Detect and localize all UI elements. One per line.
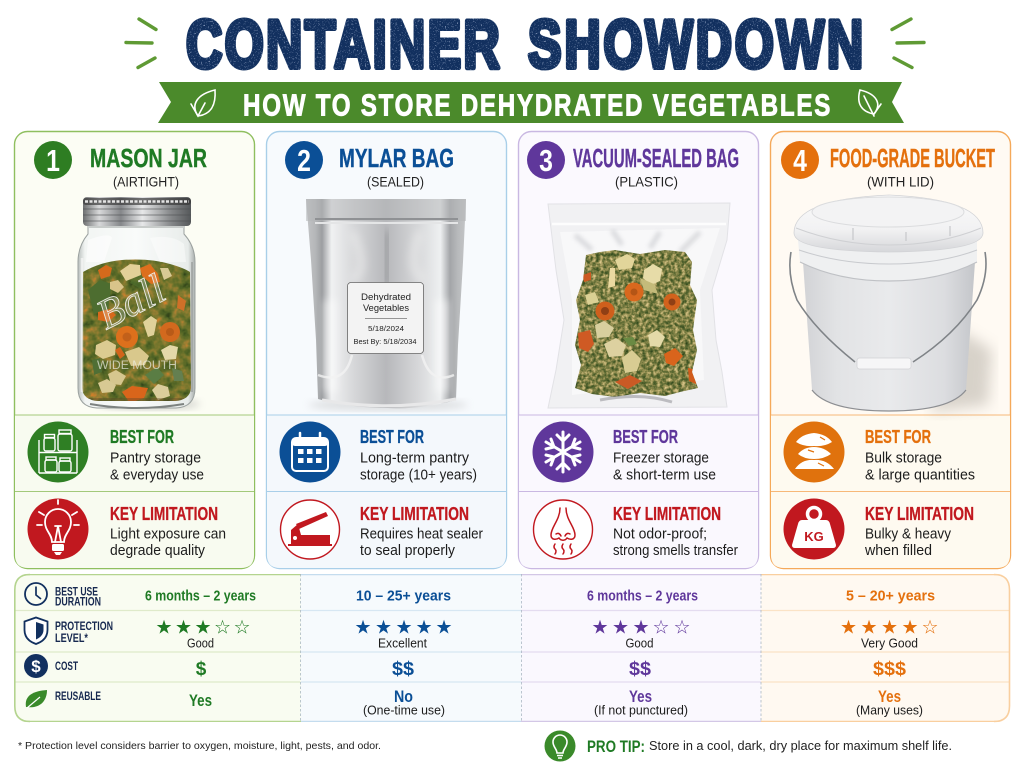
icon: shield [24,618,48,644]
title: Container Showdown: CONTAINER [186,6,500,82]
text [613,526,738,559]
text [864,526,951,559]
value: vacuum bag [594,687,688,718]
value: vacuum bag: $$ [629,659,651,680]
panel: vacuum-sealed bag [518,132,758,568]
stars: bucket 4 of 5: ★ [840,618,857,638]
label: BEST FOR [110,427,174,447]
pouch label [348,282,424,354]
value: vacuum bag: Yes [629,687,652,706]
icon: leaf [26,690,47,708]
stars: bucket 4 of 5: ☆ [921,618,939,638]
pouch label: 5/18/2024 [368,324,404,333]
value: vacuum bag: (If not punctured) [594,704,688,718]
decorative title rays left [126,19,156,68]
icon: kg weight [784,498,844,560]
best for row [784,422,975,484]
icon: nose with smell [534,500,592,559]
row label: LEVEL* [55,633,88,645]
icon: light bulb [28,498,88,560]
icon: heat sealer [280,500,340,559]
text: Long-term pantry [360,450,469,466]
value: mason jar: 6 months – 2 years [145,588,256,604]
stars: bucket 4 of 5 [840,618,939,638]
icon: leaf left [191,90,215,116]
image: glass mason jar [78,197,200,410]
value: bucket [856,687,923,718]
stars: mylar bag 5 of 5: ★ [354,618,372,638]
stars: vacuum bag 3 of 5: ★ [591,618,609,638]
pro tip [544,730,952,762]
ribbon text: HOW TO STORE DEHYDRATED VEGETABLES [243,88,830,122]
label: KEY LIMITATION [613,504,721,524]
text [360,526,483,559]
number badge 1 [34,141,72,179]
label: KEY LIMITATION [865,504,974,524]
image: white bucket with lid [790,195,992,412]
panel: mylar bag [266,132,506,568]
row: cost [24,654,906,680]
icon: green bulb [544,730,576,762]
label: BEST FOR [360,427,424,447]
subheading: (WITH LID) [867,174,934,190]
stars: bucket 4 of 5: ★ [860,618,878,638]
icon: dollar: $ [31,657,41,676]
number badge 2: 2 [297,143,311,178]
heading: MASON JAR [90,143,207,173]
rating text: Excellent [378,636,427,650]
stars: mylar bag 5 of 5: ★ [435,618,453,638]
text [360,450,477,484]
text [110,526,226,559]
stars: mylar bag 5 of 5: ★ [395,618,413,638]
value: mylar bag: $$ [392,659,414,680]
label: KEY LIMITATION [360,504,469,524]
stars: mason jar 3 of 5 [155,618,251,638]
value: bucket: $$$ [873,659,906,680]
icon: stacked sacks [784,422,844,482]
text: Bulk storage [865,450,942,466]
pouch label: Dehydrated [361,292,411,302]
value: mylar bag [363,687,445,718]
text: Requires heat sealer [360,526,483,542]
text: strong smells transfer [613,542,738,559]
label: BEST FOR [865,427,931,447]
text: to seal properly [360,542,455,559]
value: mason jar: Yes [189,691,212,710]
icon: leaf right [859,90,881,116]
subheading: (PLASTIC) [615,174,678,190]
row label: BEST USE [55,586,98,598]
image: silver mylar pouch [306,199,468,411]
text: & everyday use [110,466,204,484]
row label: REUSABLE [55,691,101,703]
text: degrade quality [110,542,205,559]
row: reusable [26,687,923,718]
icon: dollar [24,654,48,678]
key limitation row [784,498,974,560]
stars: vacuum bag 3 of 5: ☆ [673,618,691,638]
text: Bulky & heavy [865,526,951,542]
stars: mason jar 3 of 5: ★ [155,618,173,638]
stars: mason jar 3 of 5: ☆ [233,618,251,638]
label: KEY LIMITATION [110,504,218,524]
rating text: Good [187,636,214,650]
subheading: (AIRTIGHT) [113,174,179,190]
stars: mylar bag 5 of 5 [354,618,453,638]
value: bucket: 5 – 20+ years [846,588,935,604]
pouch label: Vegetables [363,303,410,313]
icon: clock [25,583,47,605]
tip label: PRO TIP: [587,737,645,756]
icon: pantry shelves [28,422,88,482]
row label: PROTECTION [55,621,113,633]
stars: bucket 4 of 5: ★ [901,618,919,638]
row label [55,586,101,608]
number badge 1: 1 [46,143,60,178]
rating text: Good [626,636,654,650]
panel: mason jar [14,132,254,568]
jar embossed wording: WIDE MOUTH [97,360,177,372]
stars: mason jar 3 of 5: ★ [194,618,212,638]
heading: VACUUM-SEALED BAG [573,143,739,173]
icon: calendar [280,422,340,482]
key limitation row [534,500,738,559]
value: mylar bag: (One-time use) [363,704,445,718]
row label [55,621,113,645]
stars: mason jar 3 of 5: ★ [175,618,192,638]
title: Container Showdown [186,6,863,82]
stars: vacuum bag 3 of 5 [591,618,691,638]
tip text: Store in a cool, dark, dry place for maximum shelf life. [649,739,952,753]
image: vacuum bag with vegetables [548,203,730,408]
rating text: Very Good [861,636,918,650]
stars: mylar bag 5 of 5: ★ [375,618,392,638]
text [613,450,716,484]
text: Freezer storage [613,450,709,466]
value: vacuum bag: 6 months – 2 years [587,588,698,604]
number badge 2 [285,141,323,179]
icon: snowflake [532,422,594,482]
text: Pantry storage [110,450,201,466]
stars: vacuum bag 3 of 5: ★ [632,618,650,638]
key limitation row [28,498,226,560]
icon: kg weight: KG [804,529,824,544]
stars: bucket 4 of 5: ★ [881,618,898,638]
title: Container Showdown: SHOWDOWN [528,6,863,82]
stars: mylar bag 5 of 5: ★ [415,618,433,638]
number badge 4 [781,141,819,179]
stars: vacuum bag 3 of 5: ☆ [652,618,670,638]
subtitle ribbon [158,82,904,123]
stars: mason jar 3 of 5: ☆ [214,618,231,638]
row label: DURATION [55,596,101,608]
value: mylar bag: 10 – 25+ years [356,588,451,604]
value: mylar bag: No [394,687,413,706]
row label: COST [55,661,78,673]
stars: vacuum bag 3 of 5: ★ [612,618,629,638]
jar embossed script: Ball [90,266,173,339]
heading: MYLAR BAG [339,143,454,173]
pouch label: Best By: 5/18/2034 [354,337,416,346]
number badge 3 [527,141,565,179]
best for row [280,422,477,484]
footnote: * Protection level considers barrier to oxygen, moisture, light, pests, and odor. [18,740,381,752]
key limitation row [280,500,483,559]
row: best use duration [25,583,935,608]
text: & large quantities [865,466,975,484]
value: bucket: (Many uses) [856,704,923,718]
row: protection level [24,618,939,650]
text: when filled [864,542,932,559]
best for row [532,422,716,484]
value: bucket: Yes [878,687,901,706]
number badge 3: 3 [539,143,553,178]
decorative title rays right [892,19,924,68]
text [865,450,975,484]
subheading: (SEALED) [367,174,424,190]
comparison table [14,574,1010,722]
number badge 4: 4 [793,143,807,178]
text: Light exposure can [110,526,226,542]
text: & short-term use [613,466,716,484]
best for row [28,422,204,484]
value: mason jar: $ [196,659,207,680]
label: BEST FOR [613,427,678,447]
text: Not odor-proof; [613,526,707,542]
text [110,450,204,484]
text: storage (10+ years) [360,466,477,484]
panel: food-grade bucket [770,132,1010,568]
